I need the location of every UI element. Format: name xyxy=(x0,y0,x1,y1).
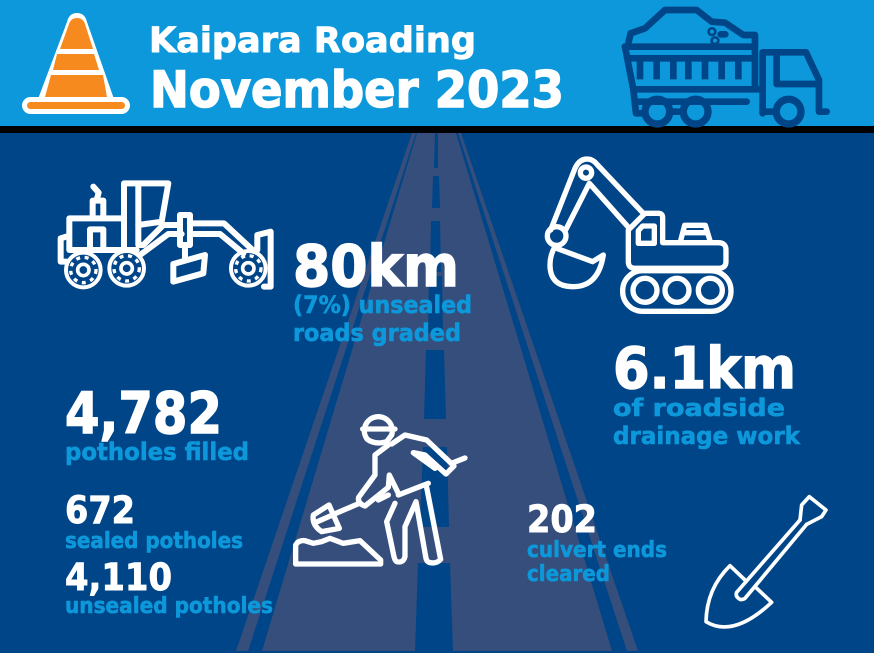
stat: 6.1km drainage work: 6.1km xyxy=(613,336,796,402)
icon: dump truck xyxy=(625,10,827,124)
title: November 2023 xyxy=(150,61,564,119)
stat: 6.1km drainage work xyxy=(613,336,801,450)
stat: 6.1km drainage work: of roadside xyxy=(613,394,785,422)
icon: road worker shovelling xyxy=(296,417,465,564)
stat: 4,782 potholes filled: potholes filled xyxy=(65,438,249,466)
icon: traffic cone xyxy=(22,13,130,114)
header banner xyxy=(0,0,874,133)
stat: 202 culvert ends cleared: culvert ends xyxy=(527,538,667,563)
road xyxy=(236,133,638,651)
title xyxy=(149,21,564,119)
stat: 4,110 unsealed potholes: 4,110 xyxy=(65,556,172,599)
stat: 4,110 unsealed potholes xyxy=(65,556,273,619)
stat: 80km unsealed roads graded: roads graded xyxy=(293,319,461,347)
stat: 672 sealed potholes: sealed potholes xyxy=(65,529,243,554)
icon: road grader xyxy=(61,183,271,287)
icon: excavator xyxy=(547,159,731,311)
stat: 202 culvert ends cleared: 202 xyxy=(527,498,597,541)
stat: 202 culvert ends cleared xyxy=(527,498,667,587)
stat: 672 sealed potholes xyxy=(65,489,243,554)
stat: 80km unsealed roads graded: (7%) unsealed xyxy=(293,291,472,319)
stat: 6.1km drainage work: drainage work xyxy=(613,422,801,450)
stat: 4,782 potholes filled: 4,782 xyxy=(65,381,222,447)
stat: 80km unsealed roads graded: 80km xyxy=(293,234,459,300)
icon: shovel xyxy=(706,497,826,627)
title: Kaipara Roading xyxy=(149,21,476,61)
stat: 80km unsealed roads graded xyxy=(293,234,472,347)
stat: 672 sealed potholes: 672 xyxy=(65,489,135,532)
stat: 202 culvert ends cleared: cleared xyxy=(527,562,610,587)
stat: 4,110 unsealed potholes: unsealed potholes xyxy=(65,594,273,619)
